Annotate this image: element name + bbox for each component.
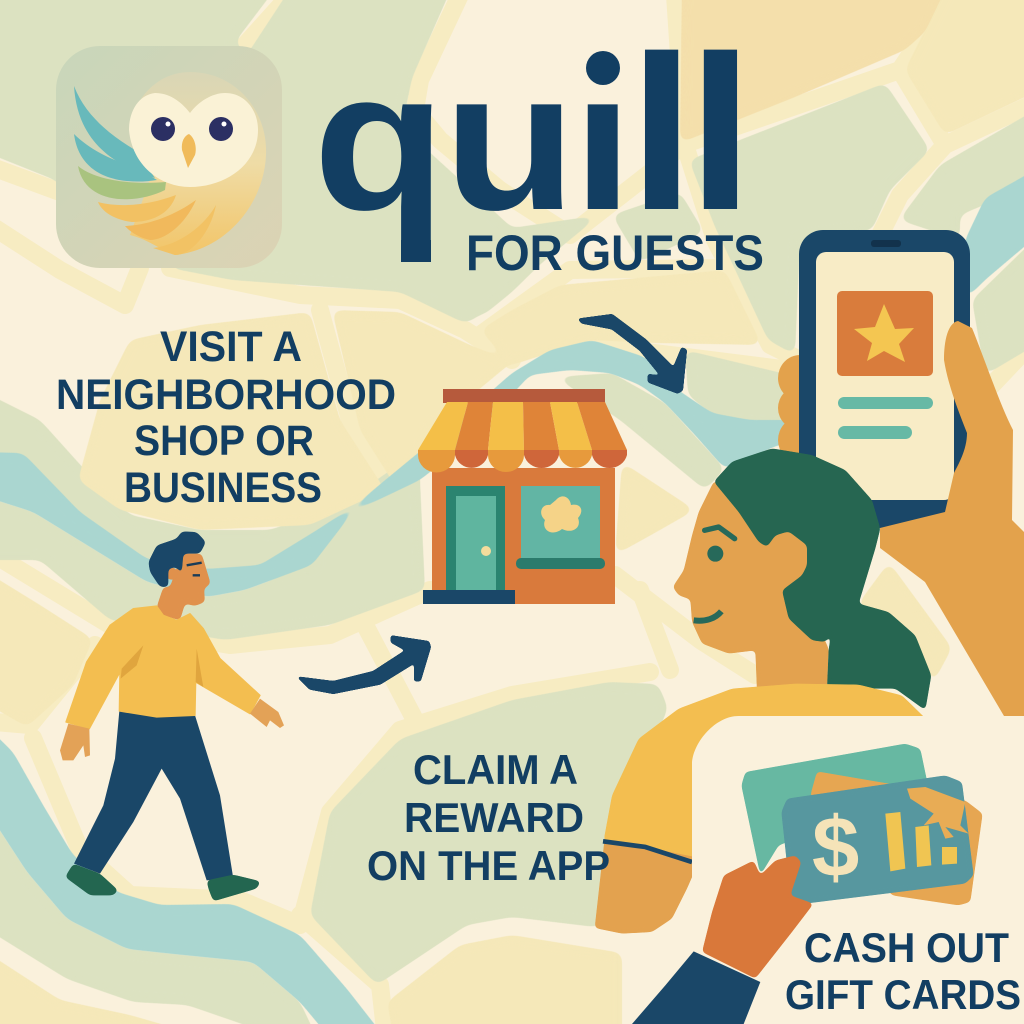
arrow: to shop: [299, 636, 430, 693]
card bars: [885, 812, 905, 871]
jacket sleeve: [632, 951, 760, 1024]
shop illustration: [418, 389, 627, 604]
owl body: [129, 72, 266, 255]
gift card green: [741, 744, 929, 875]
person hands: [60, 699, 284, 760]
holding hand: [702, 855, 814, 979]
sleeve stripe: [603, 841, 692, 862]
step text: visit a neighborhood shop: VISIT A: [160, 323, 302, 371]
owl wing feathers: [74, 86, 216, 255]
reward lines: [838, 397, 933, 409]
title: u: [443, 31, 576, 252]
hand and wrist: [880, 321, 1024, 730]
title: l: [687, 11, 754, 257]
title: i: [573, 31, 633, 252]
step text: visit a neighborhood shop: SHOP OR: [134, 417, 314, 465]
woman hair and ponytail: [714, 448, 931, 710]
step text: visit a neighborhood shop: BUSINESS: [124, 464, 322, 512]
step text: cash out: [785, 924, 1021, 1018]
owl face: [129, 93, 258, 187]
person walking: [60, 531, 284, 901]
shop door: [423, 486, 515, 604]
woman shirt: [604, 684, 933, 860]
woman face and neck: [673, 479, 829, 692]
app icon: owl logo: [56, 46, 282, 268]
shop awning: [418, 402, 627, 472]
step text: visit a neighborhood shop: [56, 323, 396, 512]
title: l: [628, 11, 695, 257]
step text: visit a neighborhood shop: NEIGHBORHOOD: [56, 371, 396, 419]
woman arm: [595, 832, 699, 934]
gift card orange: [810, 771, 983, 905]
step text: claim a reward: ON THE APP: [367, 842, 610, 889]
phone and hand: [778, 230, 1024, 730]
dollar sign: $: [812, 800, 859, 895]
arrow: to phone: [579, 315, 686, 393]
title: [313, 11, 754, 262]
person eye and brow: [187, 563, 202, 575]
phone screen: [816, 252, 954, 500]
fingers: [778, 355, 822, 463]
woman eye: [707, 546, 723, 562]
shop window: [516, 486, 605, 569]
title: q: [313, 31, 446, 252]
step text: claim a reward: REWARD: [404, 794, 584, 841]
shop building: [432, 468, 615, 604]
peach parcel: [680, 0, 950, 143]
person ear: [166, 568, 178, 580]
person pants: [74, 711, 233, 880]
person shoes: [65, 864, 261, 901]
gift card blue: [781, 775, 974, 904]
small hand on card: [907, 787, 969, 839]
step text: claim a reward: CLAIM A: [413, 746, 578, 793]
person sweater shading: [121, 645, 203, 687]
owl beak: [182, 134, 196, 168]
panel: gift cards: [632, 716, 1024, 1024]
woman smile: [694, 611, 721, 621]
step text: cash out: CASH OUT: [804, 924, 1009, 971]
subtitle: FOR GUESTS: [466, 225, 764, 281]
step text: claim a reward: [367, 746, 610, 889]
person hair: [148, 531, 206, 587]
shop cornice: [443, 389, 605, 403]
woman portrait: [595, 448, 933, 934]
phone body: [799, 230, 970, 528]
person neck and face: [157, 554, 211, 620]
person sweater: [66, 606, 260, 729]
woman brow: [705, 527, 735, 539]
reward card: [837, 291, 933, 376]
